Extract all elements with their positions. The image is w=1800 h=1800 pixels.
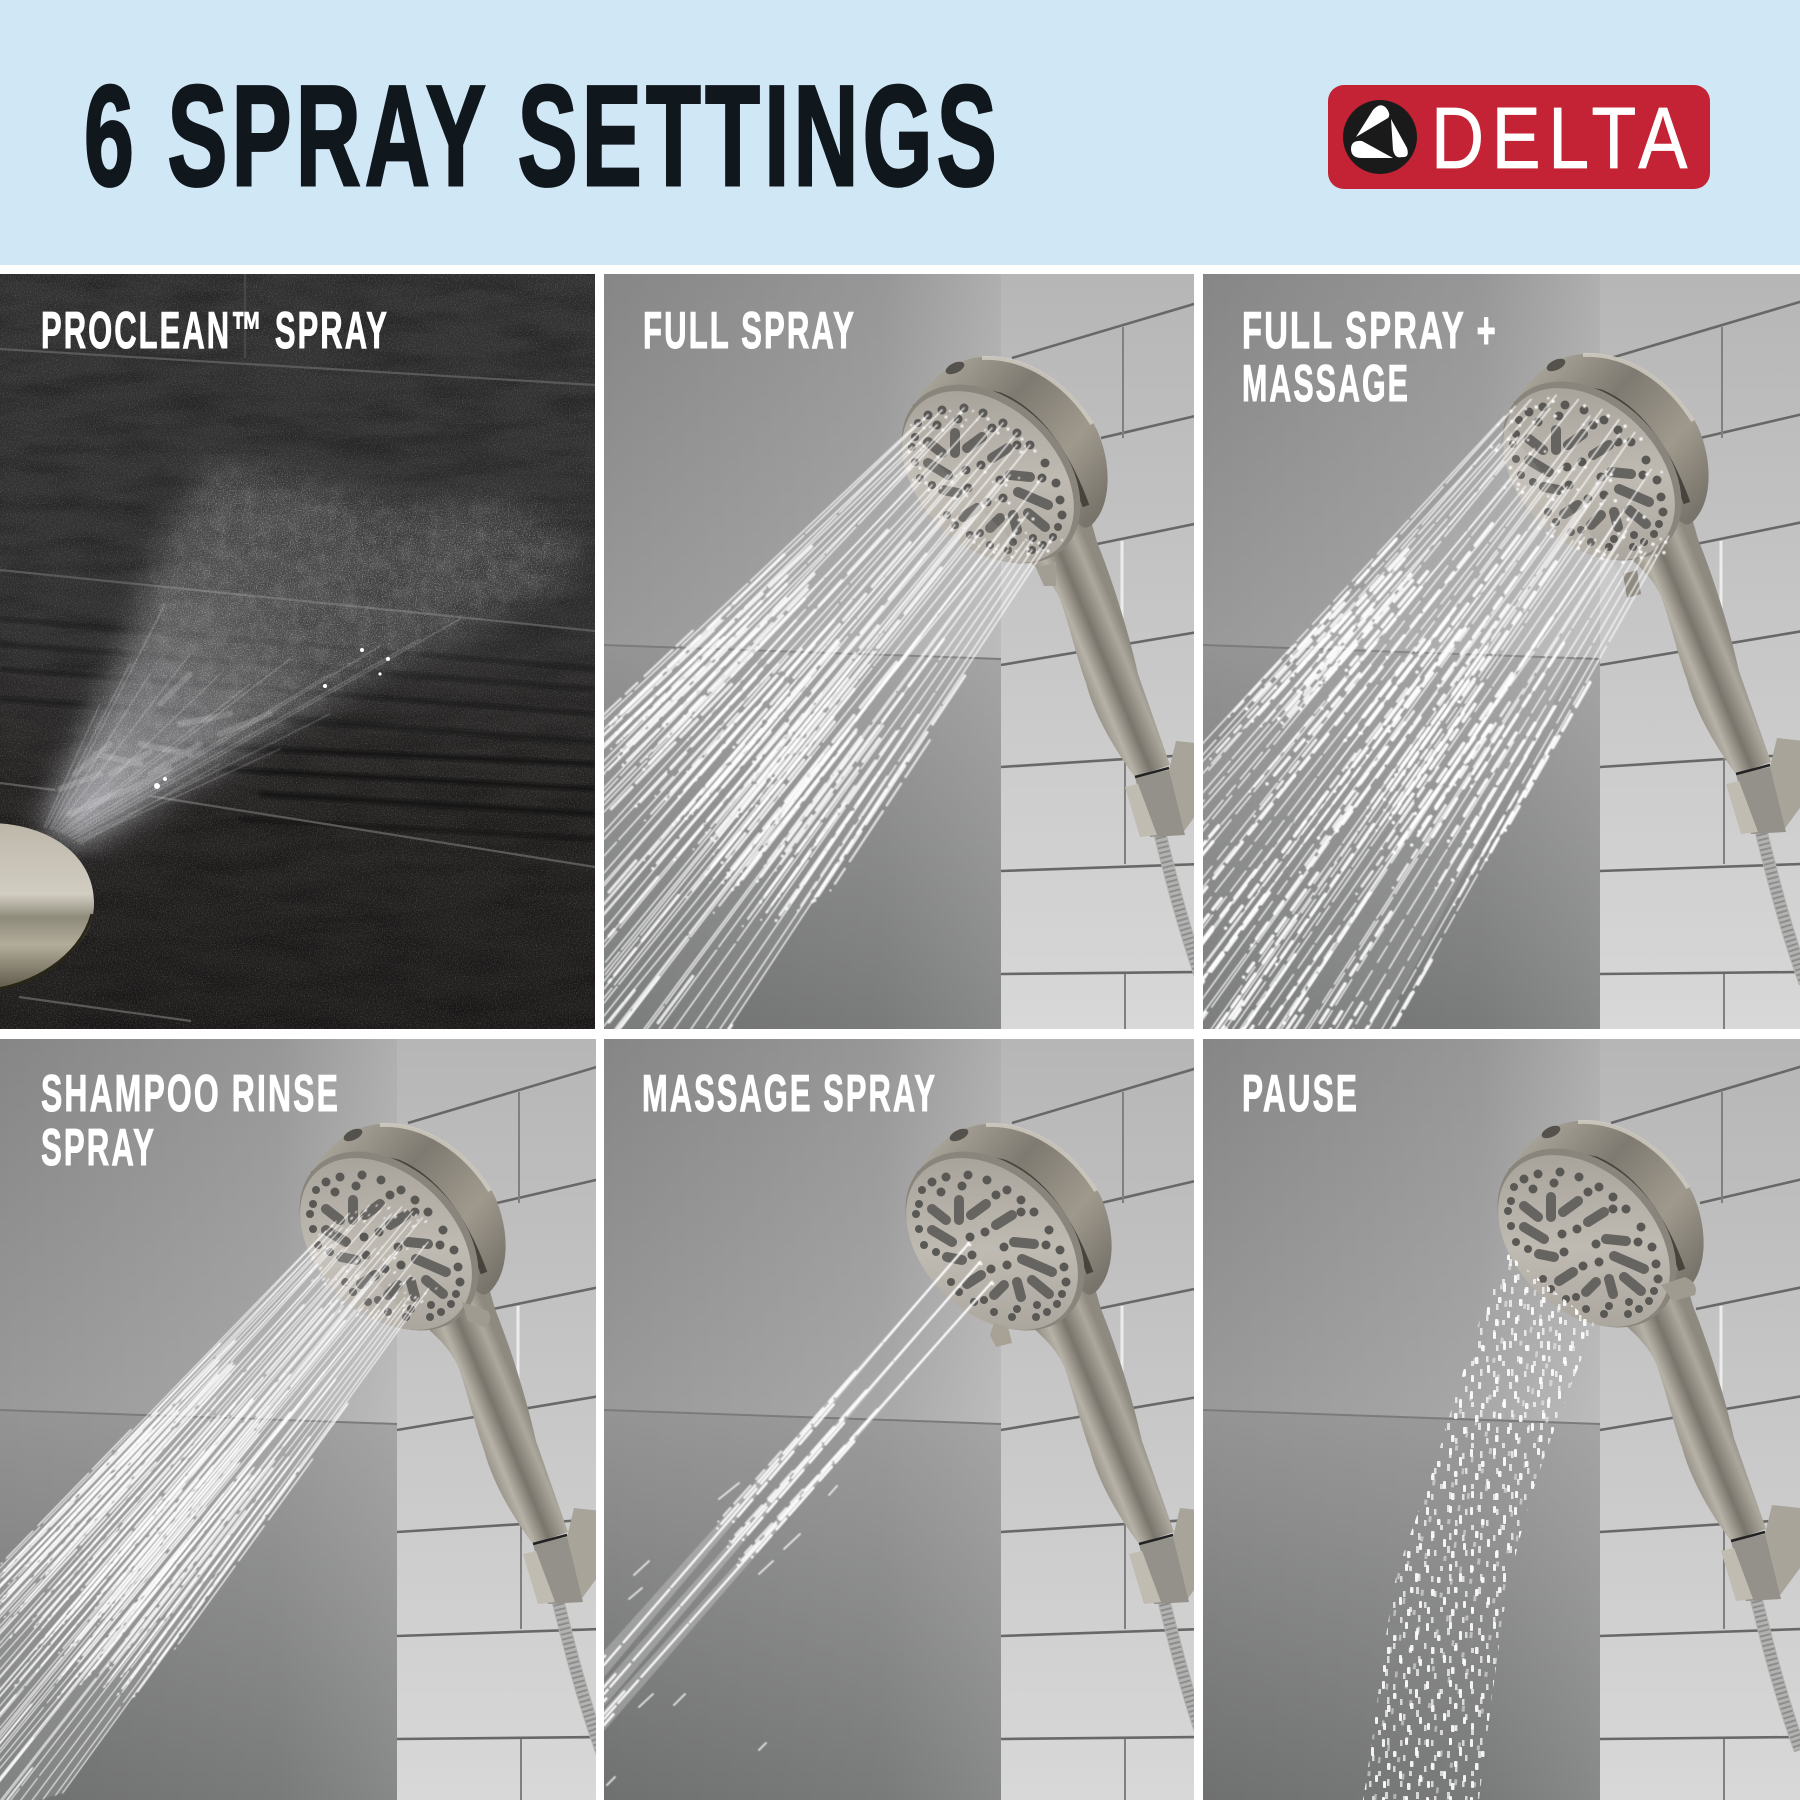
label: Shampoo rinse spray xyxy=(42,1074,337,1166)
shower head xyxy=(1502,353,1800,985)
shower head xyxy=(1463,1114,1800,1750)
panel: Full spray + massage xyxy=(1203,274,1800,1029)
shower head edge xyxy=(0,823,94,992)
trigger xyxy=(1623,570,1641,598)
water spray xyxy=(604,1243,993,1785)
wall background xyxy=(1203,274,1800,1035)
water spray xyxy=(0,1178,456,1800)
wall background xyxy=(604,274,1204,1035)
label: Shampoo rinse spray: SHAMPOO RINSE xyxy=(41,1065,340,1123)
icon: Delta triangle mark xyxy=(1343,100,1417,174)
shower head xyxy=(300,1123,596,1755)
water spray xyxy=(1203,394,1670,1029)
label: Full spray: FULL SPRAY xyxy=(643,302,856,360)
logo wordmark: DELTA xyxy=(1431,90,1695,187)
trigger xyxy=(462,1302,490,1327)
label: Full spray + massage xyxy=(1244,311,1495,402)
panel: Massage spray xyxy=(604,1039,1208,1800)
panel: ProClean spray xyxy=(0,274,595,1029)
label: Shampoo rinse spray: SPRAY xyxy=(41,1119,156,1177)
label: Pause: PAUSE xyxy=(1242,1065,1359,1123)
water spray xyxy=(597,408,1062,1036)
heading: ProClean spray: PROCLEAN™ SPRAY xyxy=(41,302,389,360)
label: Massage spray: MASSAGE SPRAY xyxy=(642,1065,937,1123)
header band xyxy=(0,0,1800,265)
trigger xyxy=(1036,562,1056,586)
trigger xyxy=(1661,1277,1696,1301)
label: Full spray + massage: MASSAGE xyxy=(1242,355,1410,413)
trigger xyxy=(990,1323,1012,1347)
title: 6 SPRAY SETTINGS xyxy=(84,57,1001,216)
wall background xyxy=(1203,1039,1800,1800)
shower head xyxy=(906,1123,1194,1732)
spray mist xyxy=(26,452,585,863)
panel: Pause xyxy=(1203,1039,1800,1800)
logo: Delta xyxy=(1328,85,1710,189)
dark stone wall xyxy=(0,274,595,1029)
panel: Shampoo rinse spray xyxy=(0,1039,602,1800)
wall background xyxy=(0,1039,600,1800)
shower head xyxy=(902,356,1194,977)
water droplets xyxy=(1363,1254,1595,1800)
panel: Full spray xyxy=(597,274,1204,1036)
wall background xyxy=(604,1039,1204,1800)
label: Full spray + massage: FULL SPRAY + xyxy=(1242,302,1498,360)
